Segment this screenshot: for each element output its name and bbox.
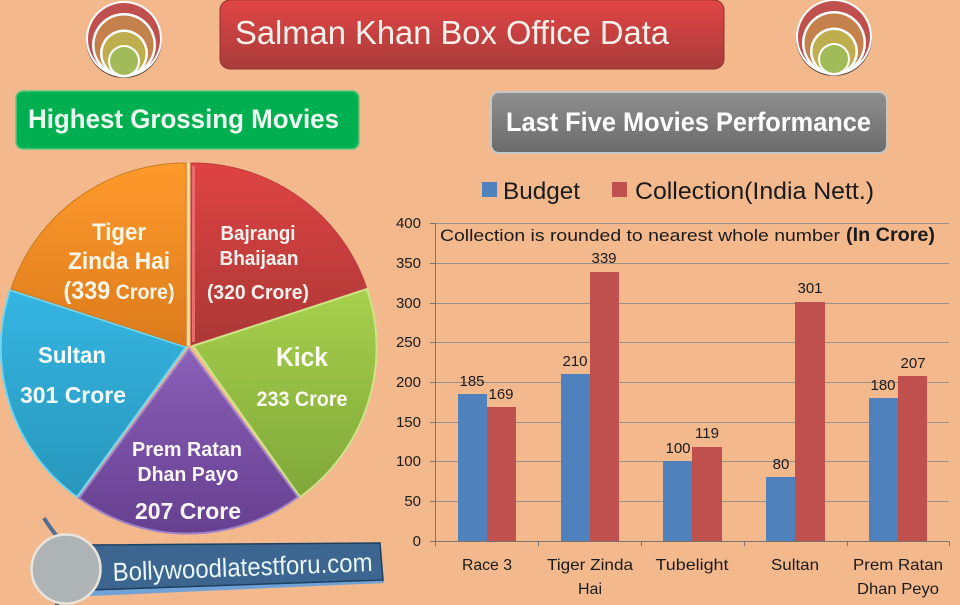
value labels: 301	[797, 280, 823, 297]
value labels: 207	[900, 355, 926, 372]
y axis labels: 0	[413, 533, 421, 550]
category labels: Tubelight	[656, 557, 729, 574]
slice: Sultan: 301 Crore	[20, 382, 126, 408]
y axis labels: 100	[396, 453, 421, 470]
slice: Tiger Zinda Hai: (339 Crore)	[64, 277, 174, 305]
slice: Prem Ratan Dhan Payo: 207 Crore	[135, 498, 241, 524]
category labels	[462, 557, 943, 598]
y axis labels: 200	[396, 374, 421, 391]
category labels: Hai	[578, 581, 602, 598]
value labels: 180	[870, 377, 896, 394]
value labels: 210	[562, 353, 588, 370]
category labels: Sultan	[771, 557, 819, 574]
title	[220, 0, 724, 69]
slice: Kick: Kick	[276, 342, 329, 372]
category labels: Prem Ratan	[853, 557, 943, 574]
title: Salman Khan Box Office Data	[235, 14, 670, 51]
slice: Sultan: Sultan	[38, 342, 106, 368]
legend: Budget	[503, 178, 580, 205]
heading: last five movies performance: Last Five Movies Performance	[506, 107, 871, 137]
slice: Prem Ratan Dhan Payo	[79, 349, 298, 534]
value labels: 339	[591, 250, 617, 267]
website banner	[32, 518, 384, 605]
slice: Sultan	[1, 290, 186, 497]
bars	[458, 272, 927, 541]
value labels: 185	[459, 373, 485, 390]
chart note: Collection is rounded to nearest whole number	[440, 226, 840, 245]
value labels: 119	[695, 425, 719, 442]
slice: Bajrangi Bhaijaan	[191, 163, 367, 345]
category labels: Race 3	[462, 557, 512, 574]
y axis labels	[396, 215, 421, 550]
value labels	[459, 250, 926, 473]
value labels: 100	[665, 440, 691, 457]
slice: Prem Ratan Dhan Payo: Dhan Payo	[138, 464, 238, 486]
heading: highest grossing movies	[16, 91, 359, 149]
category labels: Tiger Zinda	[547, 557, 633, 574]
legend	[482, 178, 874, 205]
slice: Kick: 233 Crore	[256, 388, 348, 411]
slice: Kick	[193, 289, 377, 497]
slice: Bajrangi Bhaijaan: Bhaijaan	[220, 248, 298, 270]
category labels: Dhan Peyo	[857, 581, 939, 598]
icon: right concentric circles logo	[796, 0, 872, 76]
chart note: (In Crore)	[846, 225, 935, 246]
slice: Bajrangi Bhaijaan: Bajrangi	[220, 223, 296, 245]
pie chart: highest grossing movies	[1, 163, 377, 534]
heading: last five movies performance	[491, 92, 887, 153]
slice: Bajrangi Bhaijaan: (320 Crore)	[207, 282, 309, 304]
heading: highest grossing movies: Highest Grossing Movies	[28, 104, 339, 134]
magnifier lens	[32, 534, 100, 604]
y axis labels: 250	[396, 334, 421, 351]
icon: left concentric circles logo	[86, 1, 162, 78]
y axis labels: 300	[396, 295, 421, 312]
slice: Tiger Zinda Hai	[11, 163, 188, 346]
y axis labels: 400	[396, 215, 421, 232]
legend: Collection(India Nett.)	[635, 178, 874, 205]
value labels: 169	[488, 386, 514, 403]
chart note	[440, 225, 935, 246]
slice: Tiger Zinda Hai: Zinda Hai	[68, 248, 170, 275]
slice: Tiger Zinda Hai: Tiger	[92, 219, 146, 246]
y axis labels: 150	[396, 414, 421, 431]
bar chart: budget vs collection	[396, 178, 950, 598]
value labels: 80	[773, 456, 789, 473]
slice: Prem Ratan Dhan Payo: Prem Ratan	[132, 439, 242, 461]
y axis labels: 50	[404, 493, 421, 510]
website url: Bollywoodlatestforu.com	[112, 547, 373, 587]
y axis labels: 350	[396, 255, 421, 272]
